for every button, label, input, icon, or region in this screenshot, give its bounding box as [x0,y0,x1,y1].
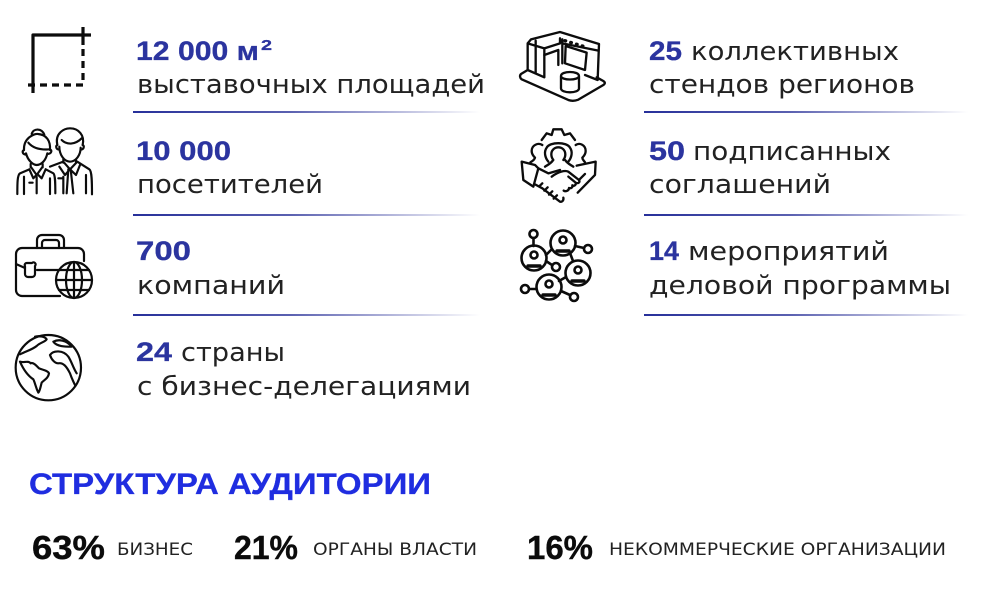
icon: handshake with people [522,129,596,202]
stat: business programme: мероприятий [688,237,889,267]
stat: regional stands: коллективных [691,37,899,67]
heading: audience structure: СТРУКТУРА АУДИТОРИИ [29,468,431,501]
stat: countries: страны [181,338,285,368]
stat: exhibition area: выставочных площадей [137,70,485,100]
stat: non-profit share: НЕКОММЕРЧЕСКИЕ ОРГАНИЗАЦИИ [609,540,946,560]
stat: business programme: деловой программы [649,271,951,301]
icon: exhibition stand [520,32,605,101]
stat: exhibition area: 12 000 м [136,36,259,66]
stat: government share: 21% [234,529,298,566]
stat: business share: БИЗНЕС [117,540,193,560]
stat: government share: ОРГАНЫ ВЛАСТИ [313,540,477,560]
stat: visitors [136,136,323,200]
stat: agreements: соглашений [649,170,831,200]
stat: regional stands [649,36,915,100]
stat: non-profit share [527,529,946,566]
stat: business programme [649,236,951,301]
stat: visitors: посетителей [137,170,323,200]
stat: non-profit share: 16% [527,529,593,566]
stat: companies: 700 [136,236,191,266]
stat: exhibition area [136,36,485,100]
stat: companies: компаний [137,271,285,301]
stat: visitors: 10 000 [136,136,231,166]
stat: regional stands: стендов регионов [649,70,915,100]
stat: agreements: подписанных [693,137,891,167]
stat: regional stands: 25 [649,36,682,66]
stat: business programme: 14 [649,236,679,266]
icon: earth [16,335,81,400]
stat: agreements: 50 [649,136,685,166]
stat: government share [234,529,477,566]
icon: network of people [521,230,592,301]
stat: companies [136,236,285,301]
stat: agreements [649,136,891,200]
icon: floor area [25,27,91,93]
stat: business share: 63% [32,529,105,566]
stat: countries [136,337,471,402]
icon: visitors [17,128,92,194]
stat: countries: с бизнес-делегациями [137,372,471,402]
stat: countries: 24 [136,337,172,367]
stat: exhibition area: 2 [261,37,272,54]
icon: briefcase with globe [16,235,92,298]
stat: business share [32,529,193,566]
